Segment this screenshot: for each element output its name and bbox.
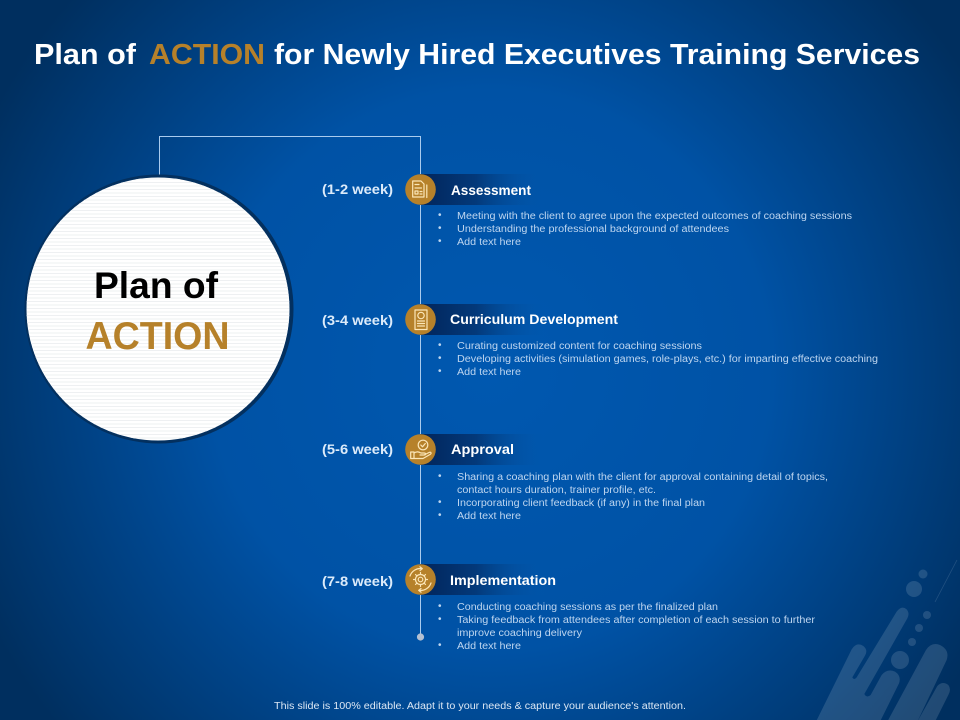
bullet list: •	[438, 223, 442, 234]
heading: Implementation	[450, 573, 556, 588]
heading: Curriculum Development	[450, 312, 619, 327]
week label: (7-8 week)	[322, 573, 393, 589]
bullet list: Taking feedback from attendees after completion of each session to further	[457, 615, 816, 626]
icon: document	[405, 174, 436, 205]
heading ribbon	[420, 564, 545, 595]
bullet list: Add text here	[457, 237, 521, 248]
circle heading: Plan of	[94, 265, 219, 306]
heading: Approval	[451, 442, 514, 457]
bullet list: •	[438, 614, 442, 625]
bullet list: •	[438, 497, 442, 508]
bullet list: •	[438, 366, 442, 377]
heading ribbon	[420, 434, 545, 465]
bullet list	[438, 471, 828, 522]
circle heading: ACTION	[86, 315, 230, 358]
circle heading	[86, 265, 230, 358]
bullet list: •	[438, 236, 442, 247]
bullet list: Add text here	[457, 511, 521, 522]
heading ribbon	[420, 304, 545, 335]
bullet list: •	[438, 510, 442, 521]
bullet list: •	[438, 471, 442, 482]
bullet list: Conducting coaching sessions as per the finalized plan	[457, 602, 718, 613]
bullet list: •	[438, 601, 442, 612]
bullet list: Sharing a coaching plan with the client for approval containing detail of topics,	[457, 472, 828, 483]
bullet list: Meeting with the client to agree upon the expected outcomes of coaching sessions	[457, 211, 852, 222]
heading ribbon	[420, 174, 545, 205]
bullet list: Curating customized content for coaching sessions	[457, 341, 702, 352]
step: implementation	[322, 564, 816, 652]
step: approval	[322, 434, 828, 522]
connector line	[160, 136, 420, 637]
bullet list: •	[438, 210, 442, 221]
title: for Newly Hired Executives Training Services	[274, 39, 920, 71]
step: assessment	[322, 174, 852, 248]
bullet list: Incorporating client feedback (if any) in the final plan	[457, 498, 705, 509]
decorative shapes bottom right	[816, 560, 957, 720]
panel: plan of action circle	[24, 174, 294, 444]
title: Plan of	[34, 39, 136, 71]
bullet list: •	[438, 640, 442, 651]
footer note: This slide is 100% editable. Adapt it to your needs & capture your audience's attention.	[274, 701, 686, 712]
bullet list: Developing activities (simulation games, role-plays, etc.) for imparting effective coaching	[457, 354, 878, 365]
bullet list: contact hours duration, trainer profile, etc.	[457, 485, 656, 496]
icon: hand with check	[405, 434, 436, 465]
bullet list	[438, 210, 852, 248]
bullet list	[438, 601, 816, 652]
step: curriculum development	[322, 304, 878, 378]
title: ACTION	[149, 39, 265, 71]
bullet list: Add text here	[457, 641, 521, 652]
bullet list: Understanding the professional background of attendees	[457, 224, 729, 235]
bullet list: Add text here	[457, 367, 521, 378]
week label: (1-2 week)	[322, 181, 393, 197]
bullet list: •	[438, 340, 442, 351]
heading: Assessment	[451, 183, 532, 198]
icon: gear	[405, 564, 436, 595]
bullet list: •	[438, 353, 442, 364]
bullet list: improve coaching delivery	[457, 628, 582, 639]
week label: (5-6 week)	[322, 441, 393, 457]
week label: (3-4 week)	[322, 312, 393, 328]
icon: certificate	[405, 304, 436, 335]
bullet list	[438, 340, 878, 378]
connector end dot	[417, 633, 424, 641]
